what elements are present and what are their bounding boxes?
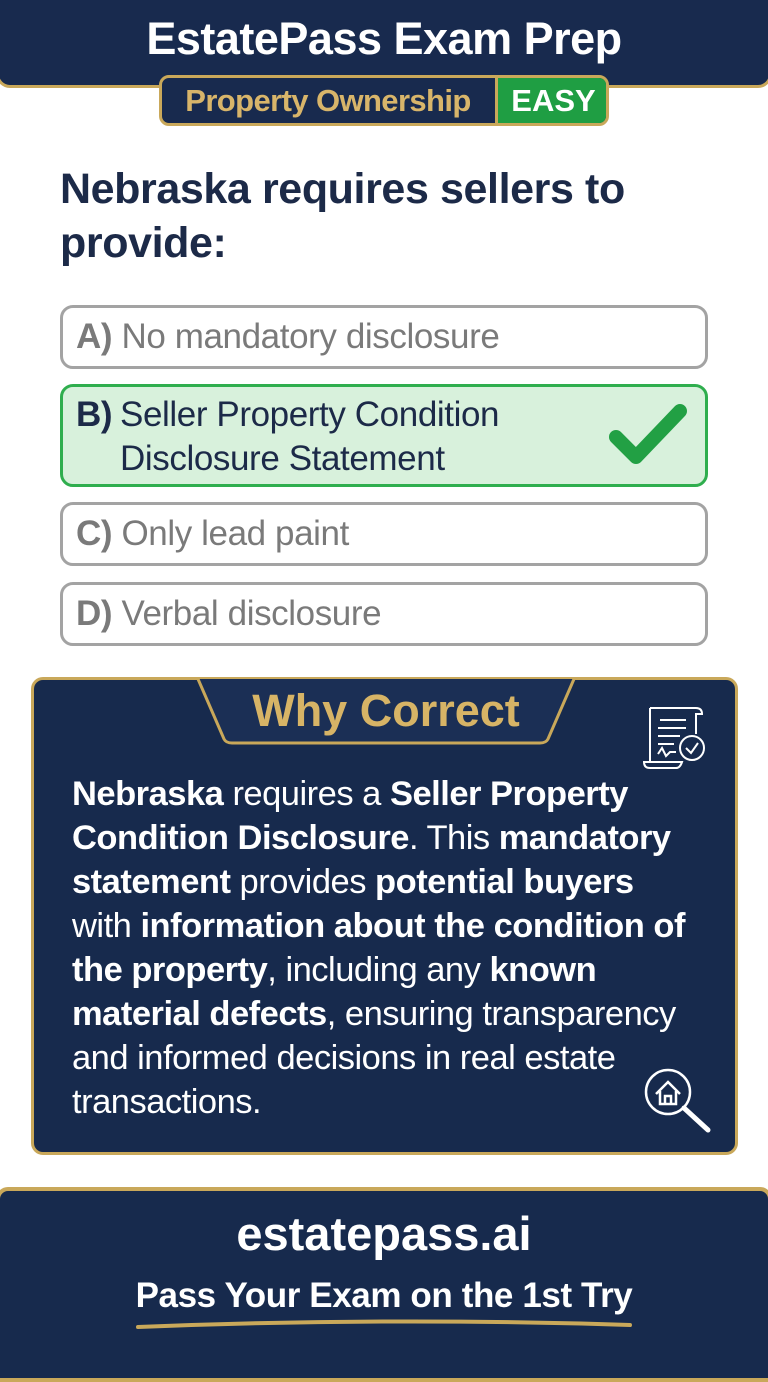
option C: C) Only lead paint <box>76 514 349 553</box>
option D: D) Verbal disclosure <box>76 594 381 633</box>
difficulty badge: EASY <box>511 83 596 118</box>
explanation text: transactions. <box>72 1083 261 1121</box>
option A <box>60 305 708 369</box>
option D <box>60 582 708 646</box>
category label: Property Ownership <box>185 83 471 118</box>
option C <box>60 502 708 566</box>
option A: A) No mandatory disclosure <box>76 317 499 356</box>
option B correct: B) <box>76 395 112 434</box>
title: EstatePass Exam Prep <box>146 13 622 64</box>
footer url: estatepass.ai <box>236 1207 532 1260</box>
icon: document with check <box>643 707 705 769</box>
explanation text: the property, including any known <box>72 951 596 989</box>
underline swoosh <box>136 1320 632 1329</box>
option B correct: Disclosure Statement <box>120 439 445 478</box>
explanation text <box>72 775 686 1121</box>
explanation text: material defects, ensuring transparency <box>72 995 676 1033</box>
panel: why correct <box>31 677 738 1155</box>
explanation text: Nebraska requires a Seller Property <box>72 775 628 813</box>
header band <box>0 0 768 88</box>
icon: check mark <box>609 404 687 464</box>
question: Nebraska requires sellers to <box>60 165 625 213</box>
explanation text: with information about the condition of <box>72 907 685 945</box>
explanation text: statement provides potential buyers <box>72 863 634 901</box>
footer band <box>0 1187 768 1382</box>
heading banner: Why Correct <box>252 685 520 736</box>
question: provide: <box>60 219 226 267</box>
option B correct <box>60 384 708 487</box>
category pill <box>159 75 609 126</box>
option B correct: Seller Property Condition <box>120 395 499 434</box>
question <box>60 165 625 267</box>
explanation text: and informed decisions in real estate <box>72 1039 615 1077</box>
icon: house magnifier <box>644 1068 710 1132</box>
explanation text: Condition Disclosure. This mandatory <box>72 819 671 857</box>
tagline: Pass Your Exam on the 1st Try <box>136 1276 632 1315</box>
difficulty badge <box>495 78 609 123</box>
heading banner <box>196 679 576 744</box>
